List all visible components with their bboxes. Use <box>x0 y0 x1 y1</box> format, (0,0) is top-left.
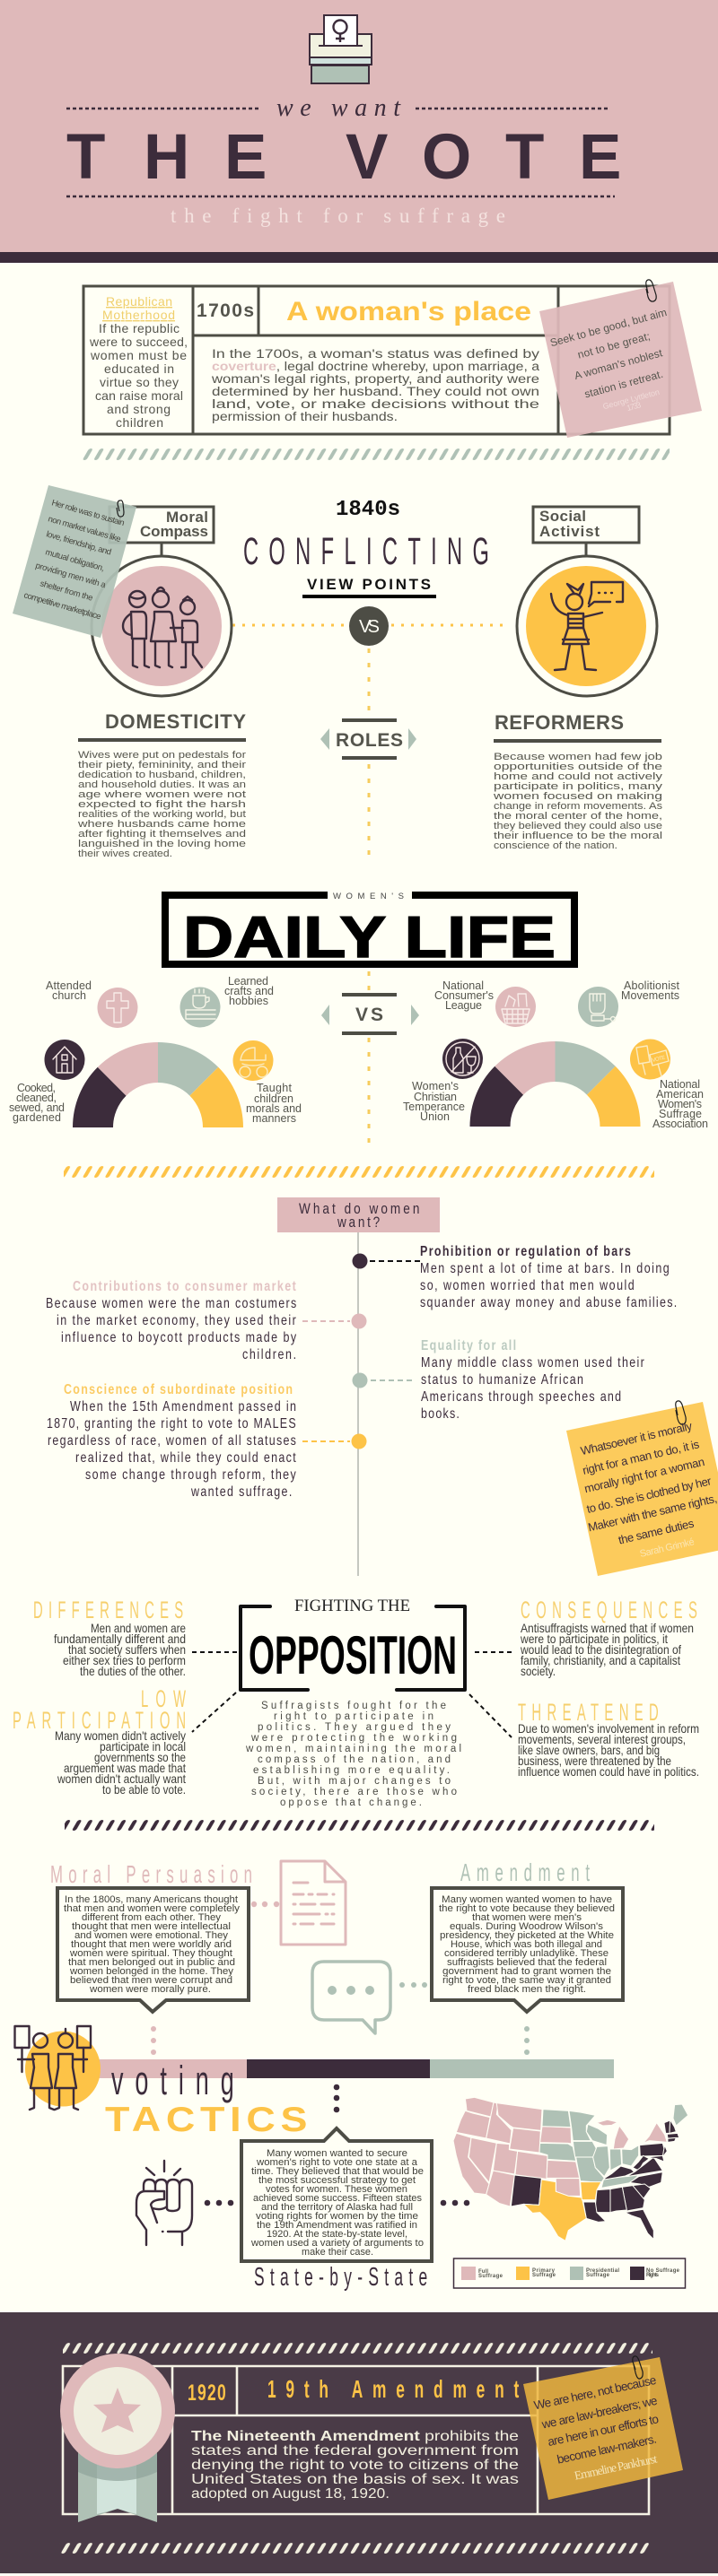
panel: a woman's place <box>83 280 702 438</box>
tri-colour bar <box>96 2059 614 2078</box>
title: fighting the opposition: FIGHTING THE <box>294 1597 410 1615</box>
text: reformers: the moral center of the home, <box>494 811 662 822</box>
box: moral persuasion: In the 1800s, many Americans thought <box>65 1894 238 1905</box>
text: reformers: they believed they could also use <box>494 821 662 831</box>
icon: raised fist with shackle <box>578 987 618 1027</box>
text: suffragists: Suffragists fought for the <box>261 1701 446 1711</box>
title frame: daily life: DAILY LIFE <box>183 904 556 970</box>
roles label: ROLES <box>336 730 403 751</box>
text: suffragists: politics. They argued they <box>258 1722 451 1733</box>
item: subordinate position: regardless of race, women of all statuses <box>48 1433 296 1449</box>
labels: domestic roles: Taught <box>257 1082 293 1094</box>
item: low participation: Many women didn't actively <box>55 1728 186 1743</box>
icon: activist <box>551 582 623 670</box>
labels: domestic roles <box>9 975 302 1125</box>
connectors <box>192 1652 515 1737</box>
heading: a woman's place: A woman's place <box>286 297 531 326</box>
body text: permission of their husbands. <box>212 410 398 423</box>
box: amendment: the right to vote because they believed <box>439 1903 615 1914</box>
item: threatened: like slave owners, bars, and big <box>518 1743 660 1757</box>
item: consequences: were to participate in politics, it <box>520 1632 668 1646</box>
note: her role: competitive marketplace <box>22 590 102 622</box>
sidebar: republican motherhood: and strong <box>107 402 171 416</box>
table frame <box>63 2366 649 2514</box>
box: amendment: government had to grant women the <box>442 1966 611 1977</box>
quote note: Sarah Grimke: right for a man to do, it is <box>582 1437 701 1477</box>
legend: Rights <box>646 2273 660 2278</box>
legend: Full <box>478 2269 488 2275</box>
item: equality for all: status to humanize African <box>421 1372 583 1388</box>
text: suffragists: oppose that change. <box>280 1797 422 1808</box>
icon: church cross <box>97 988 138 1028</box>
box: moral persuasion: women belonged in the home. They <box>69 1966 234 1977</box>
item: consumer market <box>46 1279 297 1362</box>
box: state-by-state: women's right to vote one state at a <box>256 2157 418 2168</box>
icon: vote signs: VOTE <box>652 1055 666 1064</box>
box: moral persuasion: thought that men were worldly and <box>71 1939 232 1950</box>
labels: reform groups: National <box>442 979 484 992</box>
panel: what do women want timeline <box>46 1197 718 1576</box>
sidebar: republican motherhood: Motherhood <box>102 308 175 322</box>
item: subordinate position: some change through reform, they <box>85 1467 297 1483</box>
quote note: George Lyttleton: station is retreat. <box>583 368 664 401</box>
sidebar: republican motherhood: virtue so they <box>100 375 179 389</box>
legend <box>454 2258 686 2288</box>
item: threatened: business, were threatened by the <box>518 1754 671 1768</box>
text: domesticity: where husbands came home <box>77 819 246 830</box>
labels: domestic roles: Cooked, <box>17 1082 56 1094</box>
item: consumer market: in the market economy, they used their <box>57 1313 296 1328</box>
item: low participation: women didn't actually want <box>57 1771 186 1786</box>
text: reformers: change in reform movements. As <box>494 801 663 812</box>
heading: voting: voting <box>111 2058 234 2103</box>
dots: fist link <box>205 2200 469 2206</box>
item: low participation: LOW <box>141 1684 186 1712</box>
item: low participation: to be able to vote. <box>102 1782 186 1797</box>
item: low participation: arguement was made that <box>64 1761 186 1775</box>
quote note: Sarah Grimke: Sarah Grimké <box>639 1536 696 1560</box>
text: domesticity <box>77 750 246 859</box>
icon: raised fist <box>136 2161 192 2245</box>
quote note: George Lyttleton <box>539 280 702 438</box>
body text: The Nineteenth Amendment prohibits the <box>191 2429 519 2444</box>
labels: domestic roles: sewed, and <box>9 1101 65 1114</box>
icon: document <box>281 1861 346 1945</box>
chart: reform half donut <box>470 1041 641 1127</box>
sidebar: republican motherhood: children <box>116 415 163 430</box>
quote note: Sarah Grimke: Whatsoever it is morally <box>579 1419 694 1458</box>
body text: United States on the basis of sex. It was <box>191 2472 519 2487</box>
item: consequences: Antisuffragists warned that if women <box>521 1621 694 1635</box>
timeline markers <box>302 1254 420 1449</box>
social activist circle <box>517 507 657 696</box>
heading box <box>277 1197 440 1232</box>
box: state-by-state: achieved some success. Fifteen states <box>253 2193 422 2204</box>
social activist circle: Social <box>539 508 586 525</box>
quote note: George Lyttleton: not to be great; <box>576 330 652 361</box>
item: subordinate position: Conscience of subordinate position <box>64 1382 293 1397</box>
box: moral persuasion: women were morally pure. <box>89 1984 211 1995</box>
legend: Primary <box>532 2268 556 2274</box>
box: amendment: equals. During Woodrow Wilson's <box>450 1921 604 1932</box>
labels: reform groups: National <box>660 1078 700 1091</box>
note: her role: non market values like <box>47 514 122 544</box>
item: differences: either sex tries to perform <box>63 1653 186 1667</box>
body text <box>211 347 540 423</box>
legend: Presidential <box>586 2268 619 2274</box>
item: equality for all: books. <box>421 1406 460 1422</box>
sidebar: republican motherhood: women must be <box>90 348 187 362</box>
body text: land, vote, or make decisions without the <box>212 397 539 411</box>
table frame <box>83 286 670 434</box>
box: moral persuasion: believed that men were corrupt and <box>70 1975 232 1986</box>
item: consequences <box>520 1596 697 1678</box>
item: differences: fundamentally different and <box>54 1632 186 1646</box>
item: low participation: PARTICIPATION <box>13 1706 186 1734</box>
box: moral persuasion: women were spiritual. They thought <box>69 1948 232 1959</box>
text: domesticity: realities of the working world, but <box>78 809 246 820</box>
map: united states suffrage <box>453 2097 688 2241</box>
icon: ballot box <box>310 15 372 83</box>
heading: domesticity <box>77 710 246 859</box>
item: differences: Men and women are <box>91 1621 186 1635</box>
text: reformers <box>493 752 663 851</box>
text: domesticity: dedication to husband, children, <box>78 770 246 780</box>
body text: woman's legal rights, property, and authority were <box>211 372 539 386</box>
box: moral persuasion: thought that men were intellectual <box>72 1921 231 1932</box>
legend: Suffrage <box>586 2273 610 2278</box>
box: state-by-state: and the territory of Alaska had full <box>261 2202 413 2213</box>
heading: 19th amendment: 19th Amendment <box>267 2375 519 2403</box>
quote note: George Lyttleton: George Lyttleton <box>602 387 661 411</box>
box: state-by-state: 1920. At the state-by-state level, <box>267 2229 407 2240</box>
quote note: Emmeline Pankhurst: we are law-breakers; we <box>539 2394 659 2432</box>
panel: 19th amendment <box>0 2312 718 2573</box>
labels: reform groups: Women's <box>658 1098 702 1110</box>
sidebar: republican motherhood: were to succeed, <box>89 335 188 349</box>
body text: In the 1700s, a woman's status was defined by <box>212 347 539 361</box>
box: amendment: that women were men's <box>472 1912 582 1923</box>
body text: denying the right to vote to citizens of the <box>191 2458 519 2473</box>
panel: conflicting view points <box>13 485 663 864</box>
item: equality for all: Americans through speeches and <box>421 1389 621 1405</box>
title frame: daily life <box>165 890 574 970</box>
vs label <box>321 993 419 1035</box>
heading box: want? <box>337 1214 380 1231</box>
labels: domestic roles: Learned <box>228 975 268 988</box>
box: state-by-state: time. They believed that that would be <box>251 2166 424 2177</box>
icon: vote signs <box>630 1039 670 1080</box>
labels: domestic roles: church <box>52 989 86 1002</box>
legend: Suffrage <box>532 2273 556 2278</box>
date: 1700s: 1700s <box>197 300 254 321</box>
item: consequences: would lead to the disintegration of <box>520 1642 681 1657</box>
body text: coverture , legal doctrine whereby, upon marriage, a <box>212 360 540 373</box>
icon: speech bubble <box>312 1962 390 2033</box>
labels: reform groups: Christian <box>414 1091 457 1103</box>
moral compass circle <box>92 507 232 696</box>
labels: domestic roles: children <box>254 1092 293 1105</box>
title kicker: we want: we want <box>276 94 401 122</box>
legend: No Suffrage <box>646 2268 680 2274</box>
quote note: George Lyttleton: Seek to be good, but aim <box>548 306 668 349</box>
item: low participation: governments so the <box>94 1750 186 1764</box>
box: state-by-state: make their case. <box>302 2247 373 2258</box>
icon: stroller <box>233 1040 273 1081</box>
text: reformers: conscience of the nation. <box>494 840 617 851</box>
text: reformers: home and could not actively <box>494 771 663 782</box>
note: her role <box>13 485 136 638</box>
text: suffragists: compass of the nation, and <box>258 1754 451 1765</box>
text: domesticity: Wives were put on pedestals for <box>78 750 246 761</box>
box: amendment: considered terribly unladylike. These <box>444 1948 609 1959</box>
item: consequences: society. <box>521 1664 556 1678</box>
panel: voting tactics <box>14 1858 688 2292</box>
note: her role: shelter from the <box>39 579 94 604</box>
heading: moral persuasion: Moral Persuasion <box>50 1860 252 1888</box>
title: THE VOTE: THEVOTE <box>66 122 621 193</box>
quote note: Sarah Grimke: morally right for a woman <box>583 1455 705 1495</box>
labels: domestic roles: gardened <box>13 1111 61 1124</box>
labels: domestic roles: morals and <box>246 1102 302 1115</box>
text: domesticity: expected to fight the harsh <box>78 799 246 810</box>
moral compass circle: Compass <box>140 523 208 540</box>
vs badge: VS <box>359 617 380 637</box>
body text: determined by her husband. They could not own <box>212 385 539 398</box>
vs label: VS <box>355 1005 383 1025</box>
text: suffragists <box>245 1701 461 1808</box>
box: state-by-state: voting rights for women by the time <box>256 2211 418 2222</box>
labels: domestic roles: Attended <box>46 979 92 992</box>
box: state-by-state: the most successful strategy to get <box>258 2175 416 2186</box>
box: amendment: presidency, they picketed at the White <box>440 1930 614 1941</box>
labels: reform groups: Movements <box>621 989 679 1002</box>
item: subordinate position <box>47 1382 297 1500</box>
box: state-by-state: women used a variety of arguments to <box>250 2238 424 2249</box>
item: consumer market: Because women were the man costumers <box>46 1296 296 1311</box>
heading: conflicting: CONFLICTING <box>243 531 489 573</box>
item: differences: the duties of the other. <box>80 1664 186 1678</box>
text: suffragists: establishing more equality. <box>253 1765 450 1776</box>
quote note: Emmeline Pankhurst: are here in our efforts to <box>547 2412 660 2449</box>
box: amendment: House, which was both illegal and <box>451 1939 602 1950</box>
sidebar: republican motherhood: can raise moral <box>95 388 183 403</box>
item: prohibition of bars: Men spent a lot of time at bars. In doing <box>420 1261 670 1276</box>
heading: reformers: REFORMERS <box>495 711 624 734</box>
item: subordinate position: 1870, granting the right to vote to MALES <box>47 1416 296 1432</box>
text: suffragists: were protecting the working <box>250 1733 457 1744</box>
quote note: Sarah Grimke: the same duties <box>617 1517 696 1547</box>
item: differences: DIFFERENCES <box>33 1596 183 1623</box>
text: reformers: Because women had few job <box>494 752 662 762</box>
box: moral persuasion: different from each other. They <box>82 1912 222 1923</box>
text: domesticity: after fighting it themselves and <box>78 829 246 840</box>
title frame: daily life: WOMEN'S <box>333 892 404 901</box>
body text <box>191 2429 519 2502</box>
chart: domestic roles half donut <box>73 1042 243 1127</box>
item: differences: that society suffers when <box>68 1642 186 1657</box>
item: prohibition of bars: so, women worried that men would <box>420 1278 635 1293</box>
item: subordinate position: When the 15th Amendment passed in <box>70 1399 296 1414</box>
text: reformers: opportunities outside of the <box>494 761 662 772</box>
moral compass circle: Moral <box>166 509 208 526</box>
heading: amendment: Amendment <box>460 1858 590 1886</box>
heading: state-by-state: State-by-State <box>254 2263 427 2292</box>
sidebar: republican motherhood: Republican <box>106 294 172 309</box>
box: moral persuasion: and women were emotional. They <box>74 1930 229 1941</box>
icon: family <box>123 587 202 667</box>
item: low participation: participate in local <box>100 1739 186 1754</box>
labels: reform groups: Union <box>420 1110 450 1123</box>
text: reformers: women focused on making <box>493 791 662 802</box>
item: threatened: THREATENED <box>518 1698 659 1726</box>
box: moral persuasion: that men and women were completely <box>64 1903 241 1914</box>
labels: reform groups: Women's <box>412 1080 459 1092</box>
item: consequences: family, christianity, and a capitalist <box>521 1653 680 1667</box>
quote note: Sarah Grimke: to do. She is clothed by her <box>585 1474 713 1516</box>
date: 1920: 1920 <box>188 2380 226 2406</box>
text: suffragists: right to participate in <box>274 1711 433 1722</box>
title: fighting the opposition: OPPOSITION <box>249 1625 457 1685</box>
panel: women's daily life <box>9 890 708 1145</box>
quote note: Emmeline Pankhurst: become law-makers. <box>556 2432 658 2467</box>
text: reformers: participate in politics, many <box>494 781 663 792</box>
text: suffragists: society, there are those who <box>251 1787 457 1797</box>
text: suffragists: But, with major changes to <box>258 1776 451 1787</box>
labels: domestic roles: hobbies <box>229 995 268 1007</box>
icon: teacup and books <box>180 987 221 1028</box>
item: equality for all <box>421 1338 644 1422</box>
labels: reform groups: Temperance <box>403 1101 465 1113</box>
labels: reform groups: League <box>445 999 482 1012</box>
panel: fighting the opposition <box>13 1596 699 1808</box>
text: domesticity: and household duties. It was an <box>78 779 246 790</box>
box: amendment: Many women wanted women to have <box>442 1894 612 1905</box>
date: 1840s: 1840s <box>336 498 400 522</box>
icon: shopping basket <box>495 987 536 1027</box>
item: differences <box>33 1596 186 1678</box>
item: consequences: CONSEQUENCES <box>521 1596 697 1623</box>
note: her role: mutual obligation, <box>44 547 106 574</box>
item: consumer market: influence to boycott products made by <box>61 1330 297 1345</box>
labels: reform groups: Abolitionist <box>624 979 680 992</box>
item: low participation <box>13 1684 186 1797</box>
quote note: George Lyttleton: A woman's noblest <box>573 346 664 382</box>
connector lines <box>232 624 508 626</box>
title: fighting the opposition <box>241 1597 465 1690</box>
quote note: Emmeline Pankhurst: We are here, not because <box>533 2373 658 2412</box>
body text: states and the federal government from <box>191 2443 519 2459</box>
heading: tactics: TACTICS <box>105 2100 307 2138</box>
legend: Suffrage <box>478 2274 503 2279</box>
box: state-by-state: the 19th Amendment was ratified in <box>257 2220 417 2231</box>
dots: bubble link <box>399 1982 530 2055</box>
text: suffragists: women, maintaining the moral <box>245 1744 461 1754</box>
quote note: Sarah Grimke <box>566 1401 718 1576</box>
box: state-by-state <box>241 2128 432 2261</box>
social activist circle: Activist <box>539 523 600 540</box>
box: amendment <box>432 1888 623 2012</box>
quote note: Emmeline Pankhurst <box>523 2356 683 2500</box>
dots: document link <box>151 1902 279 2055</box>
item: consumer market: Contributions to consumer market <box>73 1279 296 1294</box>
item: consumer market: children. <box>242 1347 296 1362</box>
labels: domestic roles: manners <box>252 1112 296 1125</box>
vs badge <box>349 606 389 646</box>
item: threatened <box>518 1698 699 1779</box>
icon: no alcohol <box>442 1039 483 1079</box>
item: subordinate position: realized that, while they could enact <box>75 1450 296 1466</box>
note: her role: providing men with a <box>34 561 108 590</box>
item: equality for all: Equality for all <box>421 1338 516 1353</box>
sidebar: republican motherhood <box>89 294 188 430</box>
quote note: George Lyttleton: 1733 <box>626 400 642 413</box>
labels: reform groups: Association <box>652 1118 708 1130</box>
labels: reform groups: American <box>656 1088 704 1101</box>
labels: domestic roles: cleaned, <box>16 1092 57 1104</box>
text: reformers: their influence to be the moral <box>494 831 662 841</box>
box: amendment: freed black men the right. <box>468 1984 586 1995</box>
item: prohibition of bars <box>420 1244 677 1310</box>
heading: reformers <box>493 711 663 851</box>
roles label <box>320 718 416 760</box>
panel: header <box>0 0 718 263</box>
labels: domestic roles: crafts and <box>224 985 274 997</box>
item: threatened: movements, several interest groups, <box>518 1732 686 1746</box>
box: state-by-state: votes for women. These women <box>266 2184 407 2195</box>
box: amendment: right to vote, the same way it granted <box>442 1975 611 1986</box>
icon: house <box>45 1040 84 1080</box>
subheading: view points: VIEW POINTS <box>307 576 431 593</box>
quote note: Emmeline Pankhurst: Emmeline Pankhurst <box>574 2451 659 2483</box>
heading box: What do women <box>299 1201 419 1217</box>
box: moral persuasion <box>57 1888 249 2012</box>
labels: reform groups <box>403 979 708 1130</box>
labels: reform groups: Suffrage <box>659 1108 702 1120</box>
box: moral persuasion: that men belonged out in public and <box>68 1957 235 1968</box>
item: prohibition of bars: squander away money and abuse families. <box>420 1295 677 1310</box>
text: domesticity: their piety, femininity, and their <box>78 760 246 770</box>
heading: domesticity: DOMESTICITY <box>105 710 246 733</box>
icon: women with placards <box>14 2026 101 2110</box>
box: amendment: suffragists believed that the federal <box>447 1957 607 1968</box>
text: domesticity: their wives created. <box>78 849 172 859</box>
labels: reform groups: Consumer's <box>434 989 494 1002</box>
text: domesticity: age where women were not <box>78 789 246 800</box>
subtitle: the fight for suffrage <box>171 205 505 227</box>
sidebar: republican motherhood: educated in <box>104 361 174 376</box>
item: equality for all: Many middle class women used their <box>421 1355 644 1371</box>
text: domesticity: languished in the loving home <box>78 839 246 849</box>
sidebar: republican motherhood: If the republic <box>99 321 180 335</box>
item: subordinate position: wanted suffrage. <box>190 1484 292 1500</box>
note: her role: Her role was to sustain <box>50 498 126 528</box>
note: her role: love, friendship, and <box>45 529 112 558</box>
body text: adopted on August 18, 1920. <box>191 2486 390 2502</box>
dots: state link <box>334 2084 339 2112</box>
quote note: Sarah Grimke: Maker with the same rights, <box>587 1492 718 1534</box>
item: prohibition of bars: Prohibition or regulation of bars <box>420 1244 631 1259</box>
icon: award ribbon <box>60 2354 175 2522</box>
box: state-by-state: Many women wanted to secure <box>267 2148 407 2159</box>
